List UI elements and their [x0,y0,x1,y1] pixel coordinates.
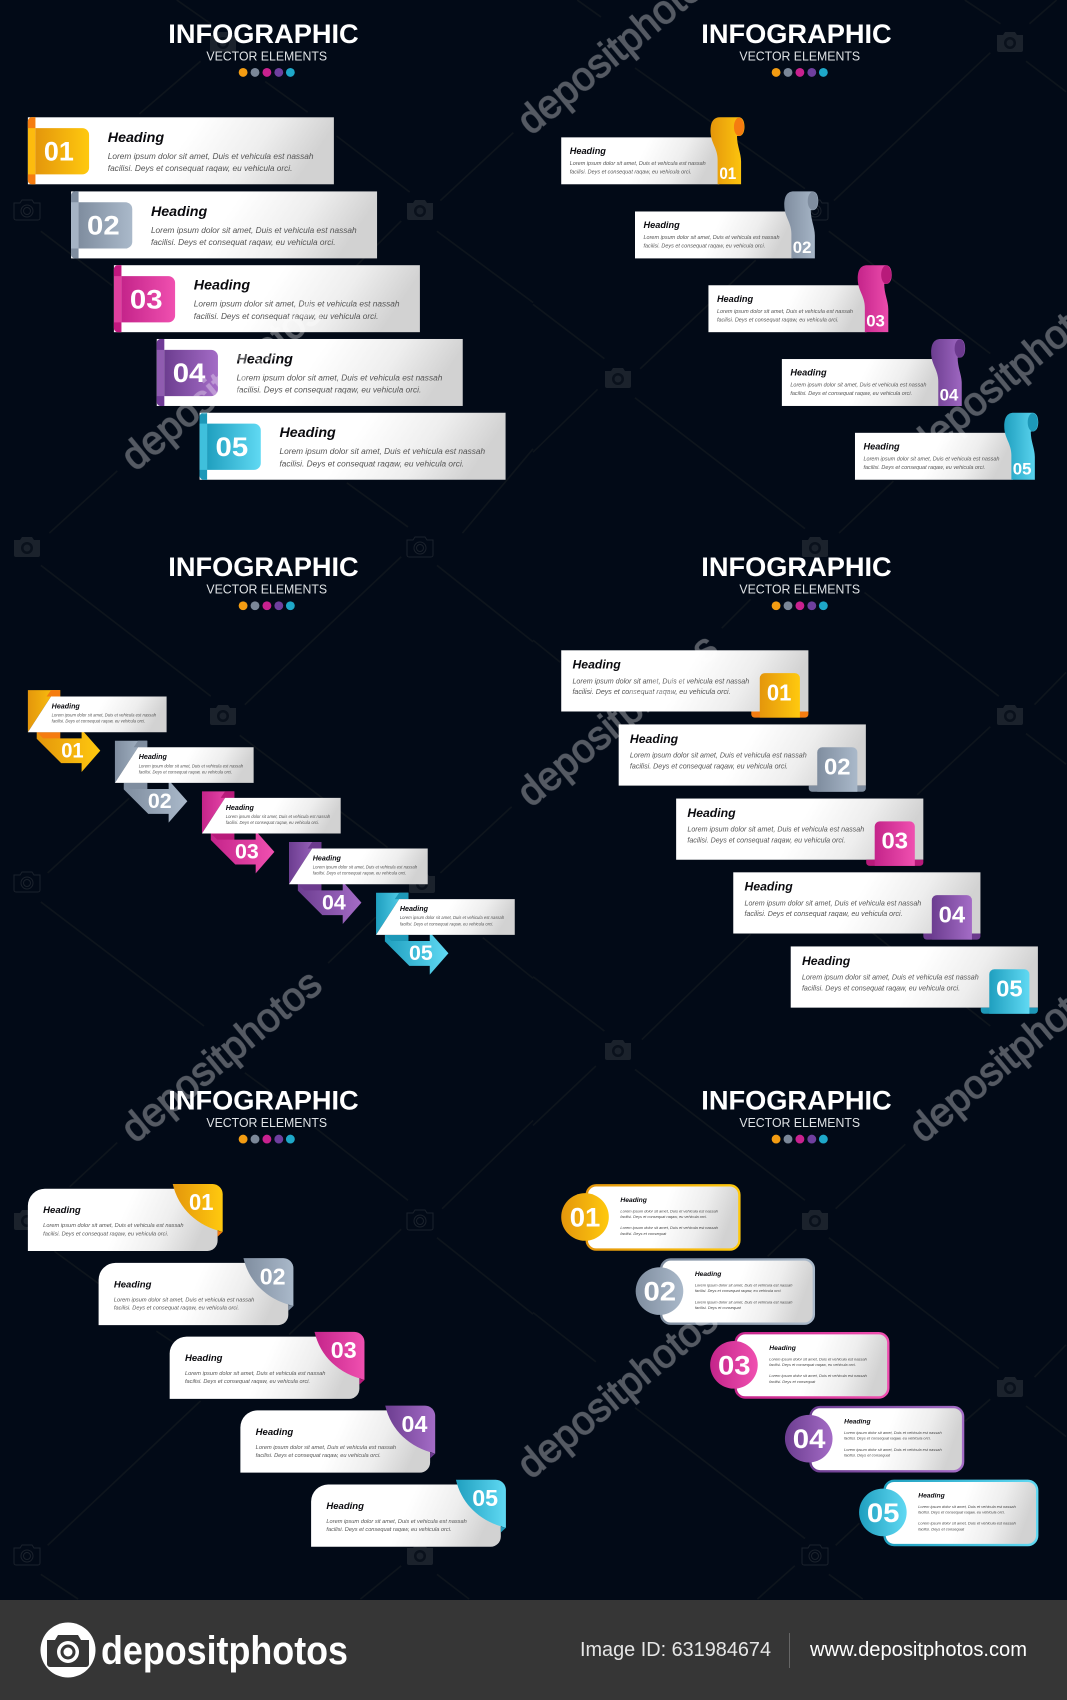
step 02: Lorem ipsum dolor sit amet, Duis et vehicula est nassah [151,226,357,235]
title: VECTOR ELEMENTS [206,49,327,64]
step 01: Lorem ipsum dolor sit amet, Duis et vehicula est nassah [620,1226,718,1230]
step 04: 04 [402,1411,428,1437]
step 04: 04 [939,901,965,927]
step 05: Lorem ipsum dolor sit amet, Duis et vehicula est nassah [918,1505,1016,1509]
step 05: facilisi. Deys et consequat raqaw, eu vehicula orci. [802,984,960,992]
step 03: Lorem ipsum dolor sit amet, Duis et vehicula est nassah [717,309,853,315]
step 05: Heading [326,1501,364,1512]
step 02: Heading [630,732,679,746]
title: VECTOR ELEMENTS [206,582,327,597]
step 04 [240,1406,435,1473]
step 01: 01 [767,679,792,705]
title: INFOGRAPHIC [168,18,359,49]
step 04: 04 [322,891,346,914]
step 02: 02 [793,239,811,257]
step 01 [561,117,744,184]
step 04: Heading [844,1419,871,1426]
step 01: facilisi. Deys et consequat [620,1232,667,1236]
step 01: Lorem ipsum dolor sit amet, Duis et vehicula est nassah [52,713,157,718]
step 04: facilisi. Deys et consequat raqaw, eu vehicula orci. [744,910,903,918]
step 02: Lorem ipsum dolor sit amet, Duis et vehicula est nassah [114,1297,254,1303]
step 01: Lorem ipsum dolor sit amet, Duis et vehicula est nassah [43,1223,184,1229]
step 02 [99,1258,293,1325]
step 03: Heading [687,806,736,820]
step 04: Lorem ipsum dolor sit amet, Duis et vehicula est nassah [844,1431,942,1435]
step 03 [170,1332,364,1399]
step 02: 02 [824,753,851,779]
step 05 [859,1481,1037,1545]
step 05: Heading [279,425,336,441]
step 01: Heading [570,146,606,156]
step 03 [676,799,923,866]
step 02 [635,191,818,258]
step 05: Heading [802,954,851,968]
step 03: facilisi. Deys et consequat raqaw, eu vehicula orci. [769,1363,856,1367]
title [168,1085,359,1144]
step 04 [289,842,428,924]
step 04 [157,339,463,406]
step 02: Lorem ipsum dolor sit amet, Duis et vehicula est nassah [695,1284,792,1288]
step 05: facilisi. Deys et consequat raqaw, eu vehicula orci. [326,1527,452,1533]
panel: slanted cards with arrows [28,551,515,975]
step 04: Heading [313,854,342,862]
title [701,1085,892,1144]
step 05: 05 [996,975,1023,1001]
step 05: facilisi. Deys et consequat raqaw, eu vehicula orci. [918,1510,1005,1514]
panel: outlined cards with number circles [561,1085,1037,1545]
step 03 [202,791,341,873]
step 02: facilisi. Deys et consequat raqaw, eu vehicula orci. [630,762,788,770]
icon: camera logo [40,1622,96,1678]
diagonal watermarks: depositphotos [113,289,330,479]
step 04: 04 [940,387,958,405]
step 05 [376,893,515,975]
step 01: Heading [108,130,164,146]
step 02: 02 [644,1276,676,1307]
step 05: Lorem ipsum dolor sit amet, Duis et vehicula est nassah [918,1522,1016,1526]
step 01: 01 [189,1189,214,1215]
step 01: Lorem ipsum dolor sit amet, Duis et vehicula est nassah [570,161,706,167]
step 02: 02 [260,1263,286,1289]
step 04: facilisi. Deys et consequat raqaw, eu vehicula orci. [313,871,406,876]
step 05: facilisi. Deys et consequat raqaw, eu vehicula orci. [279,459,464,468]
step 02: facilisi. Deys et consequat raqaw, eu vehicula orci. [114,1305,239,1311]
step 05: 05 [472,1485,498,1511]
step 02: facilisi. Deys et consequat raqaw, eu vehicula orci. [644,244,765,250]
title [168,18,359,77]
step 01: Heading [43,1205,81,1216]
step 03: Lorem ipsum dolor sit amet, Duis et vehicula est nassah [226,814,331,819]
title: VECTOR ELEMENTS [739,582,860,597]
title: INFOGRAPHIC [701,551,892,582]
step 03: facilisi. Deys et consequat raqaw, eu vehicula orci. [185,1379,310,1385]
step 01 [28,690,167,772]
title: INFOGRAPHIC [168,1085,359,1116]
step 02: Lorem ipsum dolor sit amet, Duis et vehicula est nassah [695,1300,792,1304]
step 01: facilisi. Deys et consequat raqaw, eu vehicula orci. [108,164,292,173]
title: VECTOR ELEMENTS [206,1115,327,1130]
title [701,18,892,77]
step 04: facilisi. Deys et consequat raqaw, eu vehicula orci. [790,391,912,397]
diagonal watermarks: depositphotos [509,625,726,815]
step 04: 04 [173,357,205,388]
panel: cards with bottom right tabs [561,551,1038,1014]
step 05: facilisi. Deys et consequat raqaw, eu vehicula orci. [400,921,493,926]
step 04: Lorem ipsum dolor sit amet, Duis et vehicula est nassah [237,373,443,382]
step 05: Lorem ipsum dolor sit amet, Duis et vehicula est nassah [326,1519,467,1525]
title: INFOGRAPHIC [701,18,892,49]
title: VECTOR ELEMENTS [739,49,860,64]
step 04: facilisi. Deys et consequat raqaw, eu vehicula orci. [256,1453,381,1459]
step 01 [28,1184,223,1251]
step 03: 03 [866,313,885,331]
step 02: 02 [148,790,172,813]
step 01 [561,1185,739,1250]
diagonal watermarks: depositphotos [113,961,330,1151]
step 04 [733,872,980,940]
step 05 [311,1480,506,1547]
diagonal watermarks [113,0,1067,1487]
step 03: Heading [185,1353,223,1364]
title: INFOGRAPHIC [701,1085,892,1116]
step 01: Lorem ipsum dolor sit amet, Duis et vehicula est nassah [620,1210,718,1214]
step 01: facilisi. Deys et consequat raqaw, eu vehicula orci. [570,169,691,175]
step 04: Heading [744,880,793,894]
step 04 [782,339,965,406]
step 03 [114,265,420,332]
image id: Image ID: 631984674 [580,1639,771,1661]
step 03: 03 [331,1337,357,1363]
step 03: Lorem ipsum dolor sit amet, Duis et vehicula est nassah [687,826,864,834]
step 03 [710,1333,888,1398]
step 02: facilisi. Deys et consequat raqaw, eu vehicula orci. [151,238,336,247]
step 02: Heading [114,1279,152,1290]
step 05: 05 [867,1497,900,1528]
step 01 [561,650,808,718]
step 02: 02 [87,210,120,241]
title: VECTOR ELEMENTS [739,1115,860,1130]
step 01: Lorem ipsum dolor sit amet, Duis et vehicula est nassah [108,152,314,161]
step 03: Heading [717,294,754,304]
step 05 [855,413,1038,480]
step 02 [71,191,377,258]
step 03: 03 [882,828,908,854]
step 03: facilisi. Deys et consequat raqaw, eu vehicula orci. [717,317,839,323]
step 02: Lorem ipsum dolor sit amet, Duis et vehicula est nassah [630,751,807,759]
step 04: Heading [237,351,293,367]
step 01: Heading [620,1197,648,1204]
logo wordmark: depositphotos [101,1629,348,1673]
step 04: Lorem ipsum dolor sit amet, Duis et vehicula est nassah [313,865,418,870]
step 02: Lorem ipsum dolor sit amet, Duis et vehicula est nassah [139,763,244,768]
panel: rounded cards with corner folds [28,1085,506,1547]
step 04: Heading [790,368,827,378]
step 05 [200,413,506,480]
step 03: Heading [226,804,255,812]
step 04: Lorem ipsum dolor sit amet, Duis et vehicula est nassah [744,899,921,907]
step 04: facilisi. Deys et consequat raqaw, eu vehicula orci. [844,1437,931,1441]
step 03: 03 [130,283,163,314]
step 05: facilisi. Deys et consequat raqaw, eu vehicula orci. [863,465,985,471]
step 02: Lorem ipsum dolor sit amet, Duis et vehicula est nassah [644,235,780,241]
step 05: Lorem ipsum dolor sit amet, Duis et vehicula est nassah [802,973,979,981]
step 04: Lorem ipsum dolor sit amet, Duis et vehicula est nassah [790,383,926,389]
step 02: Heading [695,1271,722,1278]
step 05: facilisi. Deys et consequat [918,1527,965,1531]
step 01: 01 [570,1201,600,1232]
title [168,551,359,610]
step 05: Heading [918,1492,946,1499]
step 01: facilisi. Deys et consequat raqaw, eu vehicula orci. [620,1215,707,1219]
step 03: Heading [194,278,250,294]
step 05: Heading [400,905,429,913]
step 02: facilisi. Deys et consequat raqaw, eu vehicula orci. [139,769,232,774]
step 05: 05 [409,942,433,965]
step 01: facilisi. Deys et consequat raqaw, eu vehicula orci. [52,719,145,724]
step 05 [791,946,1038,1014]
step 05: Lorem ipsum dolor sit amet, Duis et vehicula est nassah [863,456,999,462]
step 02: Heading [151,204,208,220]
step 01: 01 [719,165,736,183]
step 03 [708,265,892,332]
step 04: Lorem ipsum dolor sit amet, Duis et vehicula est nassah [256,1445,396,1451]
step 05: 05 [1013,460,1031,478]
step 01: facilisi. Deys et consequat raqaw, eu vehicula orci. [43,1231,168,1237]
step 02: facilisi. Deys et consequat [695,1306,742,1310]
step 04: Lorem ipsum dolor sit amet, Duis et vehicula est nassah [844,1448,942,1452]
panel: curled ribbons [561,18,1038,480]
title [701,551,892,610]
step 03: facilisi. Deys et consequat raqaw, eu vehicula orci. [226,820,319,825]
step 04: facilisi. Deys et consequat [844,1454,891,1458]
step 03: 03 [718,1349,751,1380]
step 01: Heading [572,658,621,672]
step 04: 04 [793,1423,825,1454]
step 03: Lorem ipsum dolor sit amet, Duis et vehicula est nassah [769,1357,867,1361]
step 03: facilisi. Deys et consequat raqaw, eu vehicula orci. [194,312,378,321]
step 04 [785,1407,963,1471]
step 03: facilisi. Deys et consequat [769,1380,816,1384]
website: www.depositphotos.com [809,1639,1027,1661]
step 01: 01 [61,739,84,762]
step 01: Heading [52,702,80,710]
step 02 [115,741,254,823]
step 02 [636,1259,814,1324]
step 01: facilisi. Deys et consequat raqaw, eu vehicula orci. [572,688,731,696]
step 05: Lorem ipsum dolor sit amet, Duis et vehicula est nassah [279,447,486,456]
step 02: facilisi. Deys et consequat raqaw, eu vehicula orci. [695,1289,782,1293]
step 04: facilisi. Deys et consequat raqaw, eu vehicula orci. [237,386,421,395]
footer bar [0,1600,1067,1700]
panel: numbered tabs on the left [28,18,506,480]
step 02: Heading [139,753,167,761]
step 01: Lorem ipsum dolor sit amet, Duis et vehicula est nassah [572,677,749,685]
step 03: 03 [235,841,259,864]
step 05: 05 [216,431,248,462]
step 02 [619,724,866,792]
step 04: Heading [256,1427,293,1438]
step 03: Lorem ipsum dolor sit amet, Duis et vehicula est nassah [185,1371,325,1377]
step 01 [28,117,334,184]
step 03: Heading [769,1345,797,1352]
step 05: Heading [863,441,900,451]
title: INFOGRAPHIC [168,551,359,582]
step 03: facilisi. Deys et consequat raqaw, eu vehicula orci. [687,836,845,844]
step 03: Lorem ipsum dolor sit amet, Duis et vehicula est nassah [769,1374,867,1378]
step 01: 01 [44,135,74,166]
step 02: Heading [644,220,680,230]
step 05: Lorem ipsum dolor sit amet, Duis et vehicula est nassah [400,915,505,920]
step 03: Lorem ipsum dolor sit amet, Duis et vehicula est nassah [194,300,400,309]
diagonal watermarks: depositphotos [509,1297,726,1487]
